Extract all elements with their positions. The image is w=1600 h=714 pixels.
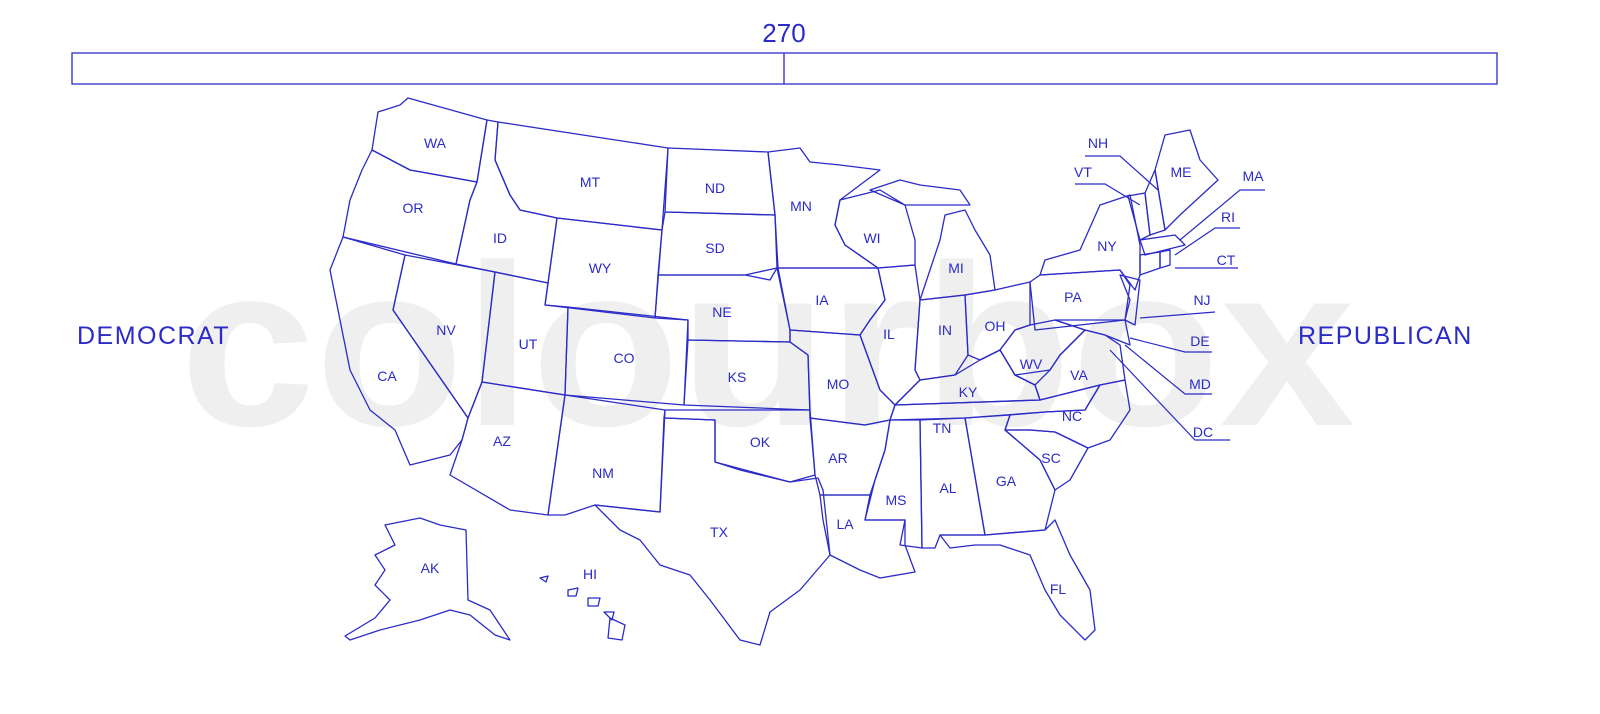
label: republican: REPUBLICAN bbox=[1298, 322, 1473, 350]
state labels: TX bbox=[710, 524, 729, 540]
state labels: FL bbox=[1050, 581, 1066, 597]
state labels: MO bbox=[827, 376, 849, 392]
state labels: NY bbox=[1097, 238, 1117, 254]
state labels: OK bbox=[750, 434, 771, 450]
HI bbox=[540, 576, 548, 582]
state labels: OH bbox=[984, 318, 1006, 334]
progress bar bbox=[72, 53, 1497, 84]
state labels: UT bbox=[519, 336, 538, 352]
state labels: ME bbox=[1170, 164, 1192, 180]
state labels: MS bbox=[886, 492, 906, 508]
state labels: MT bbox=[580, 174, 601, 190]
state labels: NE bbox=[712, 304, 732, 320]
state labels: PA bbox=[1064, 289, 1082, 305]
state labels: AR bbox=[828, 450, 848, 466]
state labels: WV bbox=[1020, 356, 1043, 372]
state labels: KY bbox=[959, 384, 978, 400]
state labels: VT bbox=[1074, 164, 1092, 180]
state labels: NH bbox=[1088, 135, 1108, 151]
state labels: GA bbox=[996, 473, 1017, 489]
state labels: WA bbox=[424, 135, 447, 151]
title: 270: 270 bbox=[762, 18, 806, 48]
state labels: MI bbox=[948, 260, 964, 276]
state labels: VA bbox=[1070, 367, 1088, 383]
state labels: AL bbox=[939, 480, 957, 496]
watermark: colourbox bbox=[180, 217, 1355, 474]
state labels: CO bbox=[614, 350, 635, 366]
state labels: IN bbox=[938, 322, 952, 338]
state labels: ID bbox=[493, 230, 507, 246]
state labels: MN bbox=[790, 198, 812, 214]
state labels: OR bbox=[402, 200, 424, 216]
state labels: NJ bbox=[1193, 292, 1211, 308]
state labels: DC bbox=[1193, 424, 1213, 440]
state labels: AK bbox=[421, 560, 440, 576]
map: US states bbox=[330, 98, 1218, 645]
state labels: LA bbox=[836, 516, 854, 532]
state labels: DE bbox=[1190, 333, 1210, 349]
state labels: TN bbox=[933, 420, 951, 436]
state labels: NV bbox=[436, 322, 456, 338]
state labels: MA bbox=[1242, 168, 1264, 184]
AK bbox=[345, 518, 510, 640]
label: democrat: DEMOCRAT bbox=[77, 322, 230, 350]
state labels: RI bbox=[1221, 209, 1235, 225]
state labels: ND bbox=[705, 180, 725, 196]
state labels: MD bbox=[1189, 376, 1211, 392]
state labels: NM bbox=[592, 465, 614, 481]
state labels bbox=[377, 135, 1264, 597]
state labels: CA bbox=[377, 368, 397, 384]
state labels: KS bbox=[728, 369, 746, 385]
state labels: IL bbox=[883, 326, 895, 342]
state labels: SC bbox=[1041, 450, 1061, 466]
state labels: WI bbox=[863, 230, 881, 246]
state labels: WY bbox=[589, 260, 612, 276]
state labels: HI bbox=[583, 566, 597, 582]
state labels: AZ bbox=[493, 433, 511, 449]
leader lines bbox=[1075, 156, 1265, 440]
state labels: NC bbox=[1062, 408, 1082, 424]
state labels: SD bbox=[705, 240, 725, 256]
state labels: CT bbox=[1217, 252, 1236, 268]
state labels: IA bbox=[815, 292, 829, 308]
